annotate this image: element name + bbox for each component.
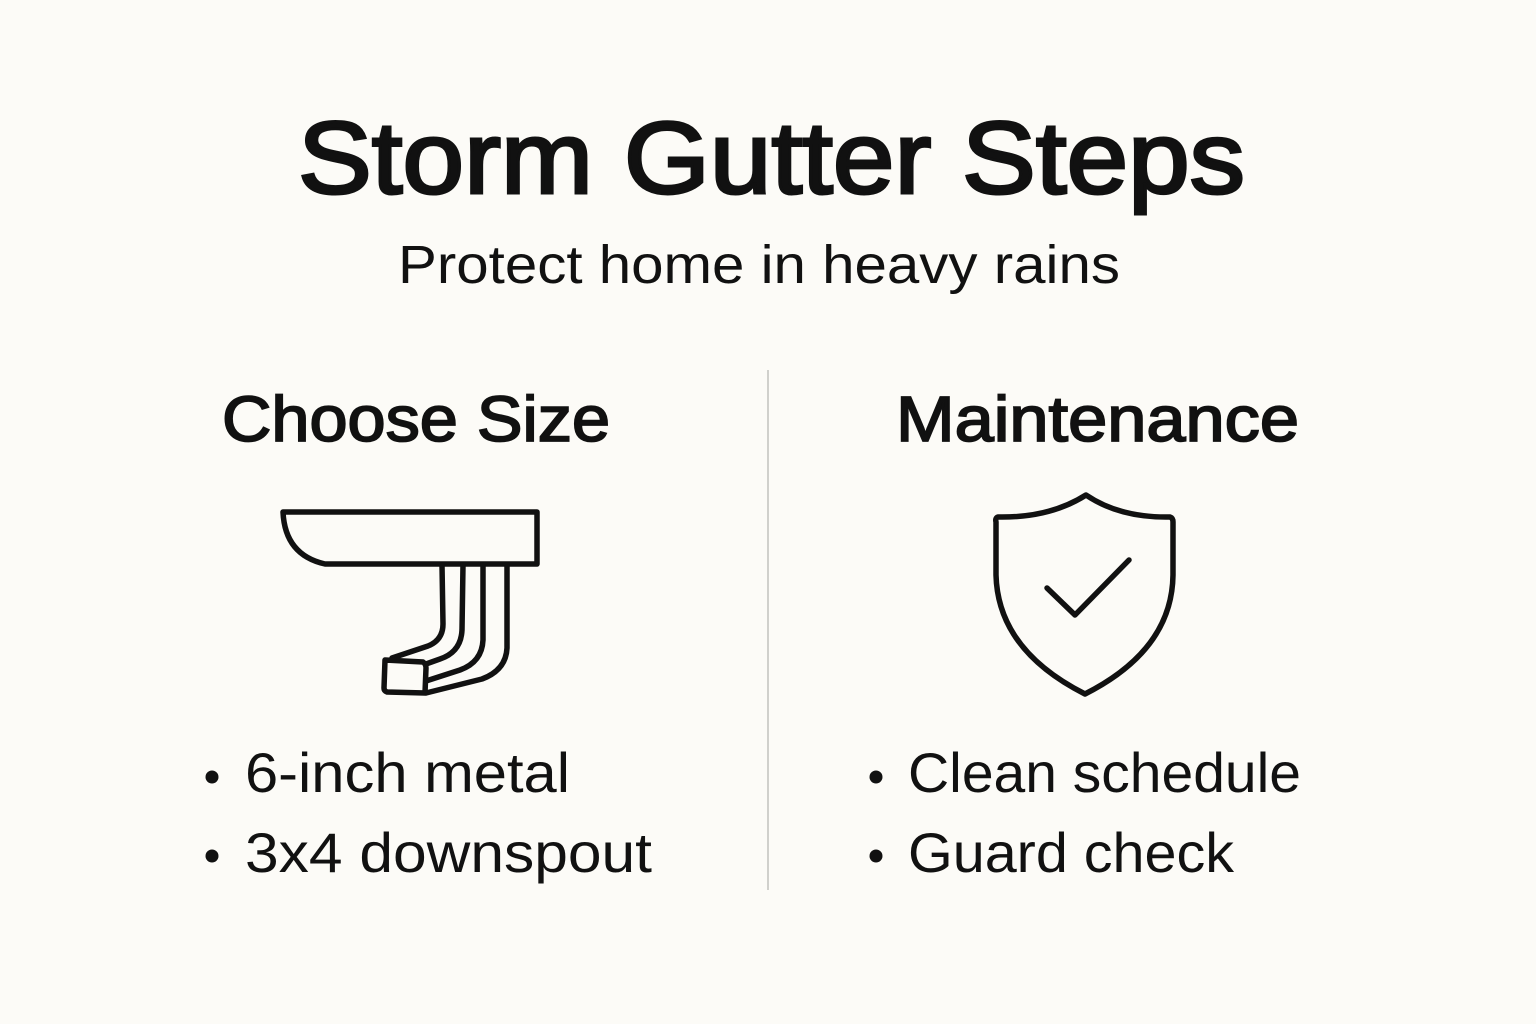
heading: Maintenance: Maintenance: [896, 383, 1299, 455]
bullets: Guard check: [908, 821, 1235, 884]
bullets: 3x4 downspout: [245, 821, 652, 884]
bullets: [870, 741, 1301, 884]
bullets: [206, 741, 652, 884]
bullets: 6-inch metal: [245, 741, 570, 804]
panel: choose size: [206, 383, 652, 884]
icon: gutter and downspout: [283, 512, 537, 693]
bullets: Clean schedule: [908, 741, 1301, 804]
title: Storm Gutter Steps: [298, 101, 1245, 215]
panel: maintenance: [870, 383, 1301, 884]
icon: shield with check: [996, 495, 1173, 694]
subtitle: Protect home in heavy rains: [398, 235, 1120, 295]
heading: Choose Size: Choose Size: [222, 383, 610, 455]
